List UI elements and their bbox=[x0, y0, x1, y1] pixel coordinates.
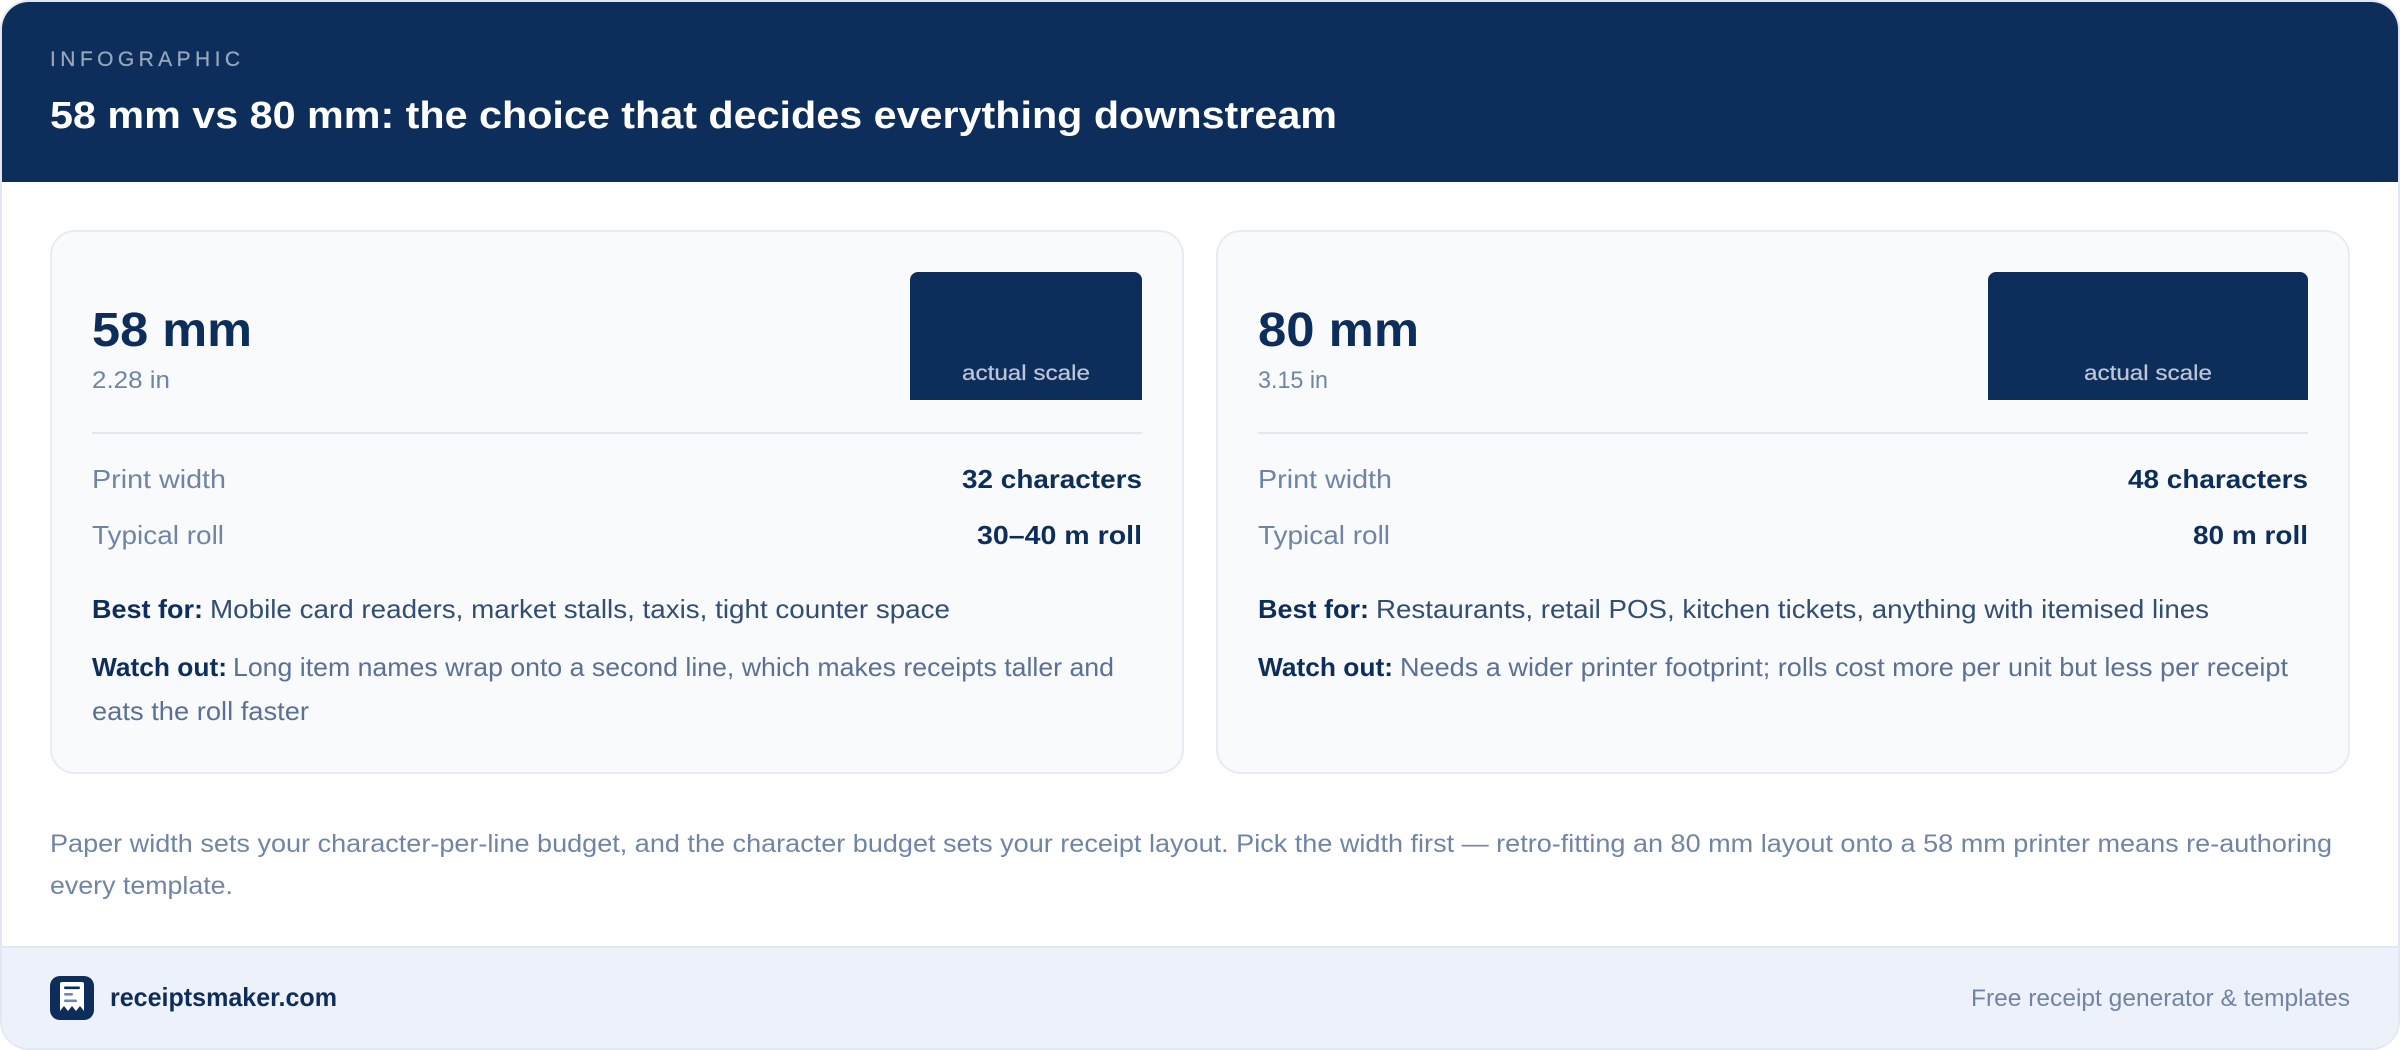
row: typical roll bbox=[1258, 520, 2308, 550]
row: print width: 32 characters bbox=[962, 464, 1142, 494]
tagline: Free receipt generator & templates bbox=[1971, 985, 2350, 1012]
row: print width bbox=[1258, 464, 2308, 494]
eyebrow label: INFOGRAPHIC bbox=[50, 48, 240, 71]
row: typical roll: 30–40 m roll bbox=[977, 520, 1142, 550]
watch out: Needs a wider printer footprint; rolls cost more per unit but less per receipt bbox=[1400, 652, 2289, 682]
inch size: 3.15 in bbox=[1258, 367, 1328, 394]
panel: 80 mm bbox=[1217, 231, 2349, 773]
row: print width: Print width bbox=[1258, 464, 1392, 494]
header band bbox=[2, 2, 2398, 182]
scale bar: 80 mm: actual scale bbox=[2084, 362, 2212, 385]
row: print width: Print width bbox=[92, 464, 226, 494]
watch out bbox=[92, 652, 1114, 726]
watch out: eats the roll faster bbox=[92, 696, 309, 726]
summary note: Paper width sets your character-per-line budget, and the character budget sets your receipt layout. Pick the width first — retro-fitting an 80 mm layout onto a 58 mm printer means re-authoring bbox=[50, 830, 2332, 858]
row: print width bbox=[92, 464, 1142, 494]
panel heading: 58 mm: 58 mm bbox=[92, 304, 252, 357]
watch out: Long item names wrap onto a second line, which makes receipts taller and bbox=[233, 652, 1114, 682]
row: typical roll: Typical roll bbox=[92, 520, 224, 550]
icon: receipt logo bbox=[50, 976, 94, 1020]
inch size: 2.28 in bbox=[92, 367, 170, 394]
row: typical roll: Typical roll bbox=[1258, 520, 1390, 550]
panel: 58 mm bbox=[51, 231, 1183, 773]
scale bar: 58 mm: actual scale bbox=[962, 362, 1090, 385]
scale bar: 80 mm bbox=[1988, 272, 2308, 400]
scale bar: 58 mm bbox=[910, 272, 1142, 400]
summary note bbox=[50, 830, 2332, 900]
best for: Best for: bbox=[1258, 594, 1369, 624]
row: print width: 48 characters bbox=[2128, 464, 2308, 494]
footer bbox=[2, 946, 2398, 1048]
watch out: Watch out: bbox=[1258, 652, 1393, 682]
title: 58 mm vs 80 mm: the choice that decides everything downstream bbox=[50, 95, 1337, 137]
best for: Restaurants, retail POS, kitchen tickets, anything with itemised lines bbox=[1376, 594, 2209, 624]
best for: Best for: bbox=[92, 594, 203, 624]
watch out: Watch out: bbox=[92, 652, 227, 682]
best for: Mobile card readers, market stalls, taxis, tight counter space bbox=[210, 594, 950, 624]
brand name: receiptsmaker.com bbox=[110, 982, 337, 1012]
summary note: every template. bbox=[50, 872, 233, 900]
panel heading: 80 mm: 80 mm bbox=[1258, 304, 1419, 357]
row: typical roll bbox=[92, 520, 1142, 550]
row: typical roll: 80 m roll bbox=[2193, 520, 2308, 550]
